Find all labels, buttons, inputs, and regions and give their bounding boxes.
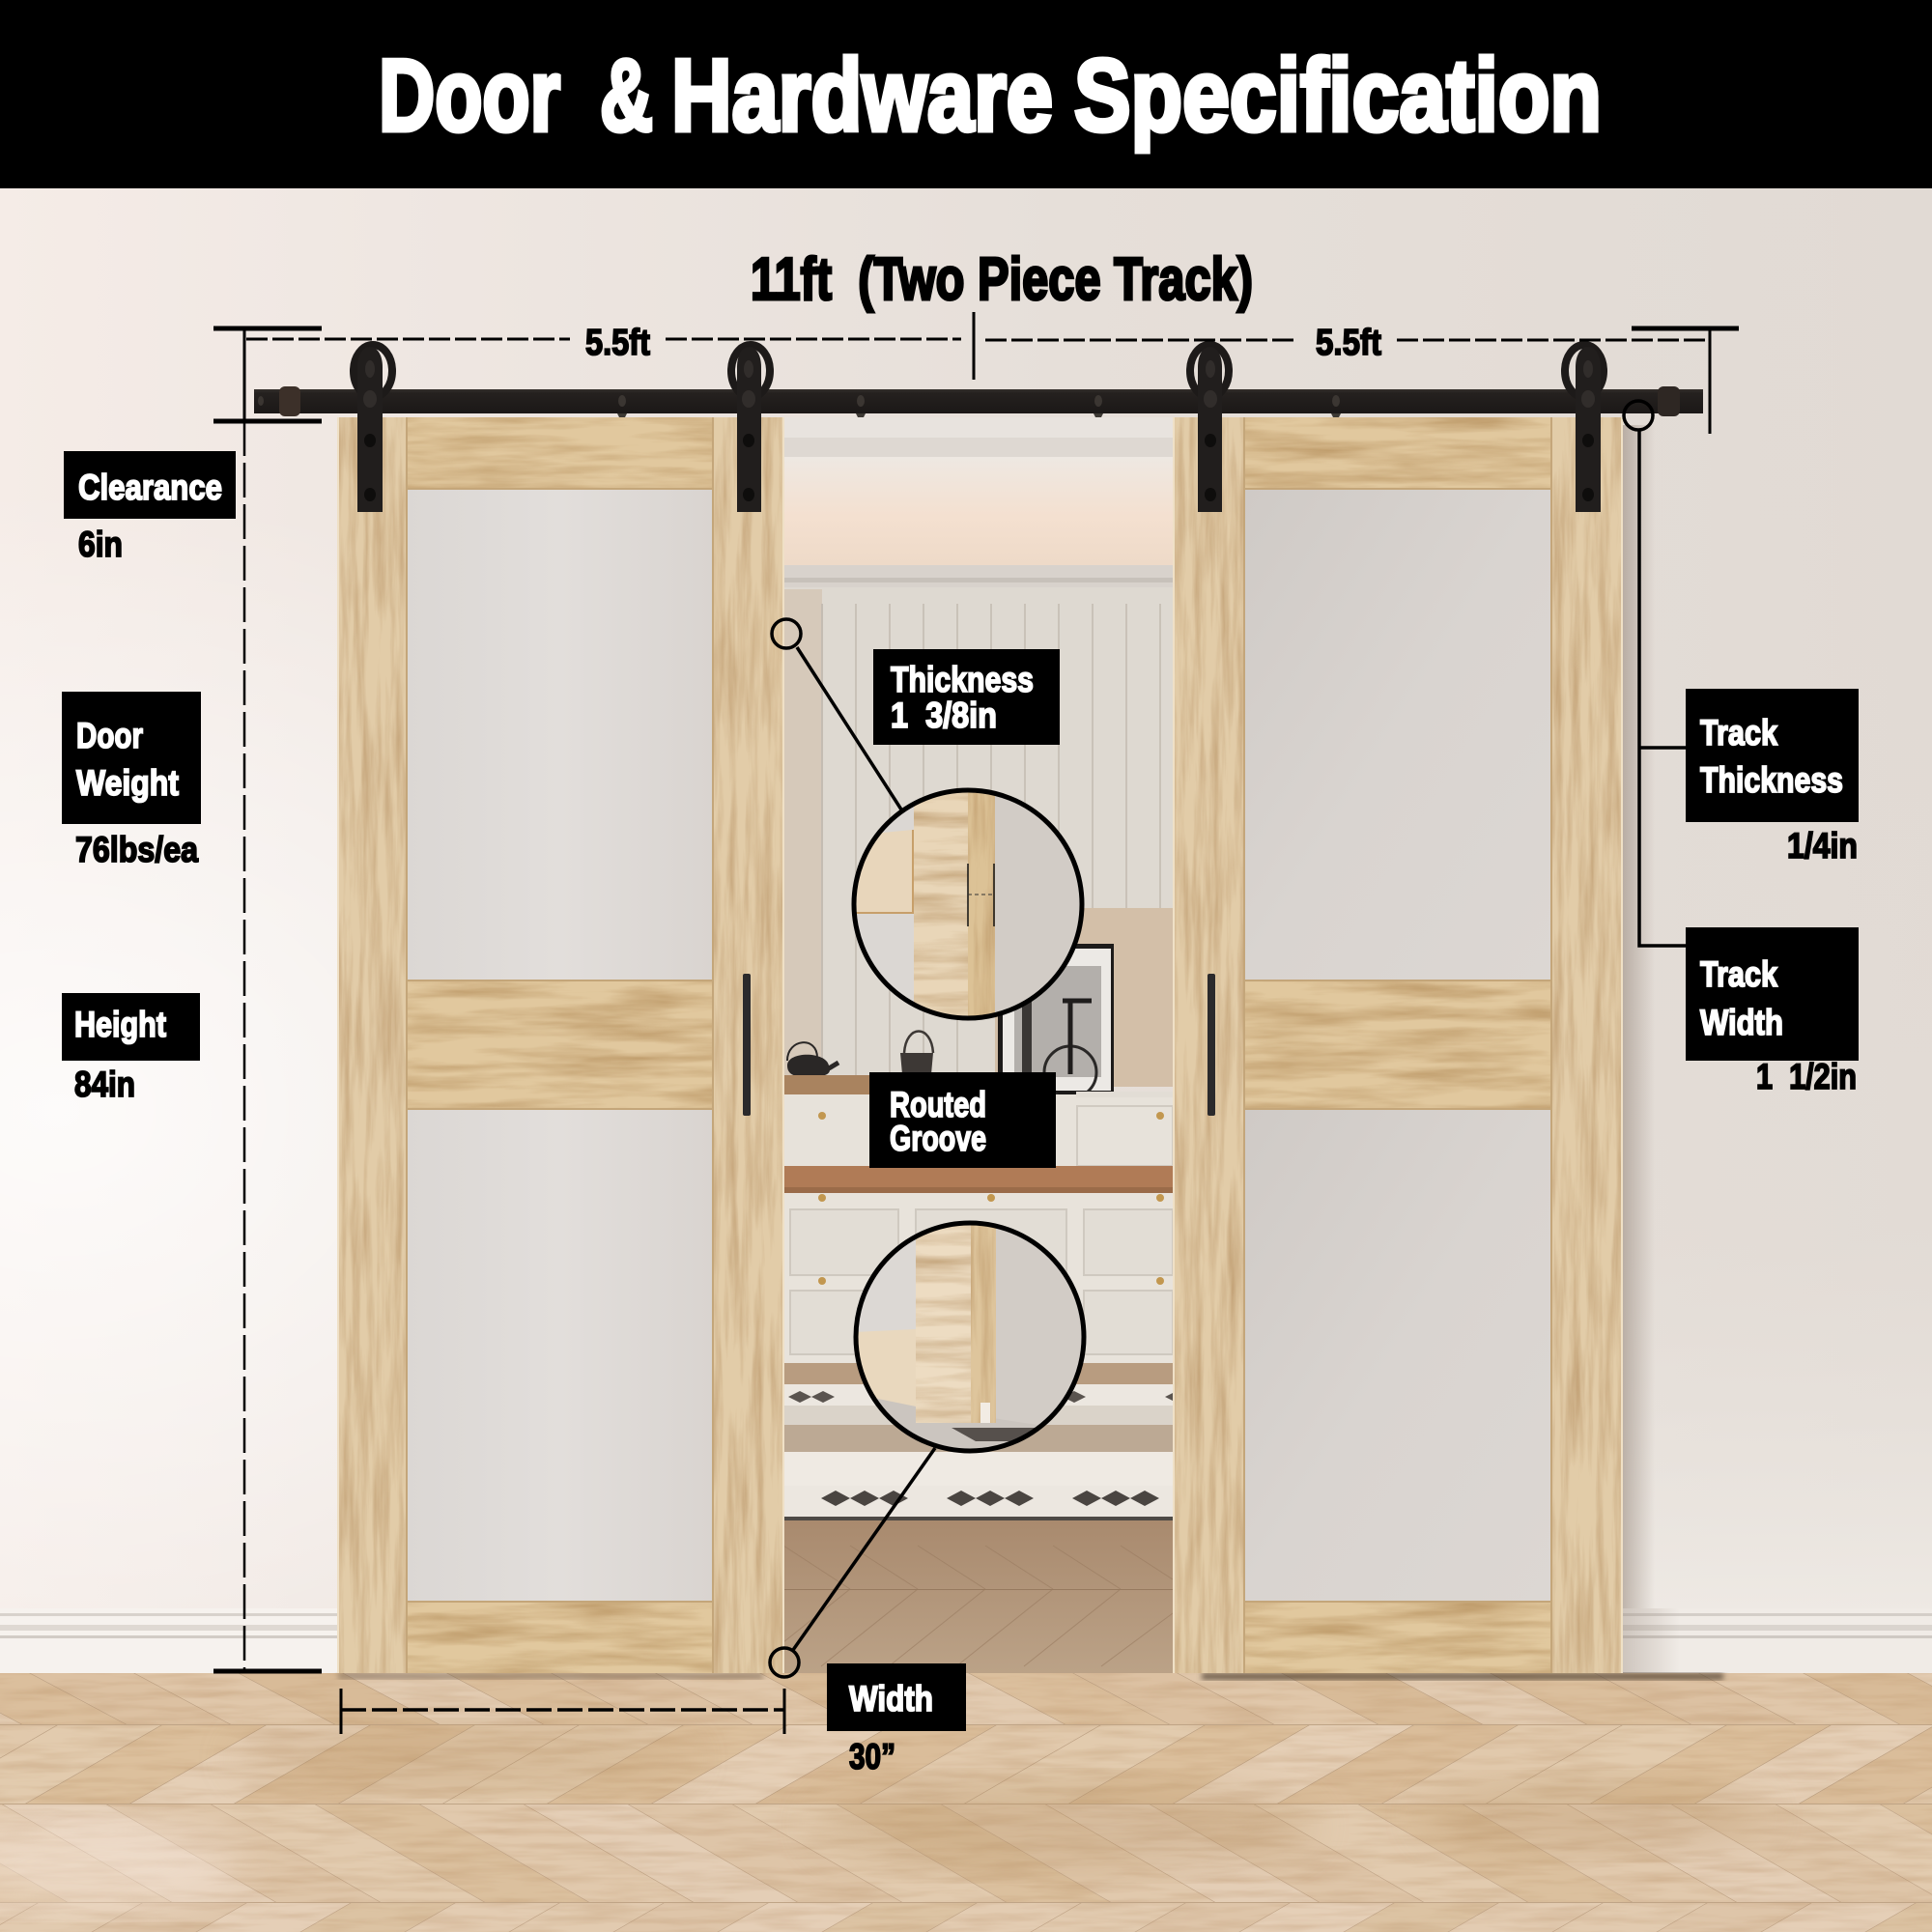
glass panel upper (1244, 489, 1551, 981)
glass panel lower (1244, 1109, 1551, 1603)
callout: track width: Track (1700, 954, 1777, 994)
track length label: 11ft (Two Piece Track) (751, 246, 1253, 313)
leader: routed groove (770, 1448, 935, 1677)
interior wood floor (783, 1520, 1173, 1673)
title: & (600, 39, 653, 153)
glass panel upper (407, 489, 713, 981)
stopper right (1658, 386, 1680, 416)
middle rail (1244, 980, 1551, 1109)
callout: clearance (64, 451, 236, 564)
title: Door (379, 39, 560, 153)
callout: door weight: Door (76, 716, 143, 755)
track width value: 1 1/2in (1756, 1057, 1857, 1096)
door handle (1208, 974, 1215, 1116)
header band (0, 0, 1932, 188)
dimension: door height (243, 421, 245, 1671)
callout: track width (1686, 927, 1859, 1096)
stopper left (279, 386, 300, 416)
callout: routed groove: Routed (890, 1085, 986, 1124)
track thickness value: 1/4in (1787, 826, 1858, 866)
callout: door weight (62, 692, 201, 869)
callout: thickness (873, 649, 1060, 745)
clearance value: 6in (78, 525, 123, 564)
door handle (743, 974, 751, 1116)
thickness value: 1 3/8in (891, 696, 997, 735)
title: Specification (1074, 39, 1602, 153)
hanger 1 (354, 345, 392, 512)
groove word: Groove (890, 1119, 986, 1158)
leader: track callouts (1624, 401, 1686, 946)
hanger 4 (1565, 345, 1604, 512)
barn door track (254, 386, 1703, 417)
top rail (407, 417, 713, 489)
callout: clearance: Clearance (78, 468, 222, 507)
height value: 84in (74, 1065, 135, 1104)
weight word: Weight (76, 763, 179, 803)
framed bicycle photograph (998, 944, 1114, 1098)
dimension: door width (341, 1689, 784, 1734)
width value: 30” (849, 1737, 895, 1776)
hanger 3 (1190, 345, 1229, 512)
herringbone floor (0, 1673, 1932, 1932)
callout: track thickness (1686, 689, 1859, 866)
bottom rail (407, 1602, 713, 1673)
tea kettle right (900, 1032, 933, 1077)
baseboard (0, 1608, 1932, 1673)
hanger 2 (731, 345, 770, 512)
backsplash (995, 908, 1173, 1087)
callout: width (827, 1663, 966, 1776)
wall background (0, 188, 1932, 1676)
tea kettle left (787, 1042, 838, 1077)
thickness word: Thickness (1700, 760, 1843, 800)
callout: height: Height (74, 1005, 166, 1044)
weight value: 76lbs/ea (75, 830, 198, 869)
left door (338, 417, 783, 1673)
magnifier: routed groove (850, 1219, 1088, 1459)
right door (1173, 417, 1622, 1673)
top rail (1244, 417, 1551, 489)
lower cabinets (783, 1193, 1173, 1363)
panelled wall (783, 587, 1173, 1082)
countertop and upper cabinets (783, 1075, 1173, 1193)
glass panel lower (407, 1109, 713, 1603)
callout: thickness: Thickness (891, 660, 1034, 699)
middle rail (407, 980, 713, 1109)
magnifier: door thickness (850, 787, 1087, 1024)
callout: track thickness: Track (1700, 713, 1777, 753)
width word: Width (1700, 1003, 1783, 1042)
rug (783, 1384, 1173, 1520)
callout: width: Width (849, 1679, 933, 1719)
leader: thickness (772, 619, 901, 810)
title: Hardware (671, 39, 1053, 153)
dimension: track top (213, 312, 1739, 1671)
title (379, 39, 1602, 153)
right track section label: 5.5ft (1316, 323, 1381, 363)
kitchen seen through the opening (783, 417, 1173, 1673)
callout: routed groove (869, 1072, 1056, 1168)
bottom rail (1244, 1602, 1551, 1673)
callout: height (62, 993, 200, 1104)
left track section label: 5.5ft (585, 323, 650, 363)
